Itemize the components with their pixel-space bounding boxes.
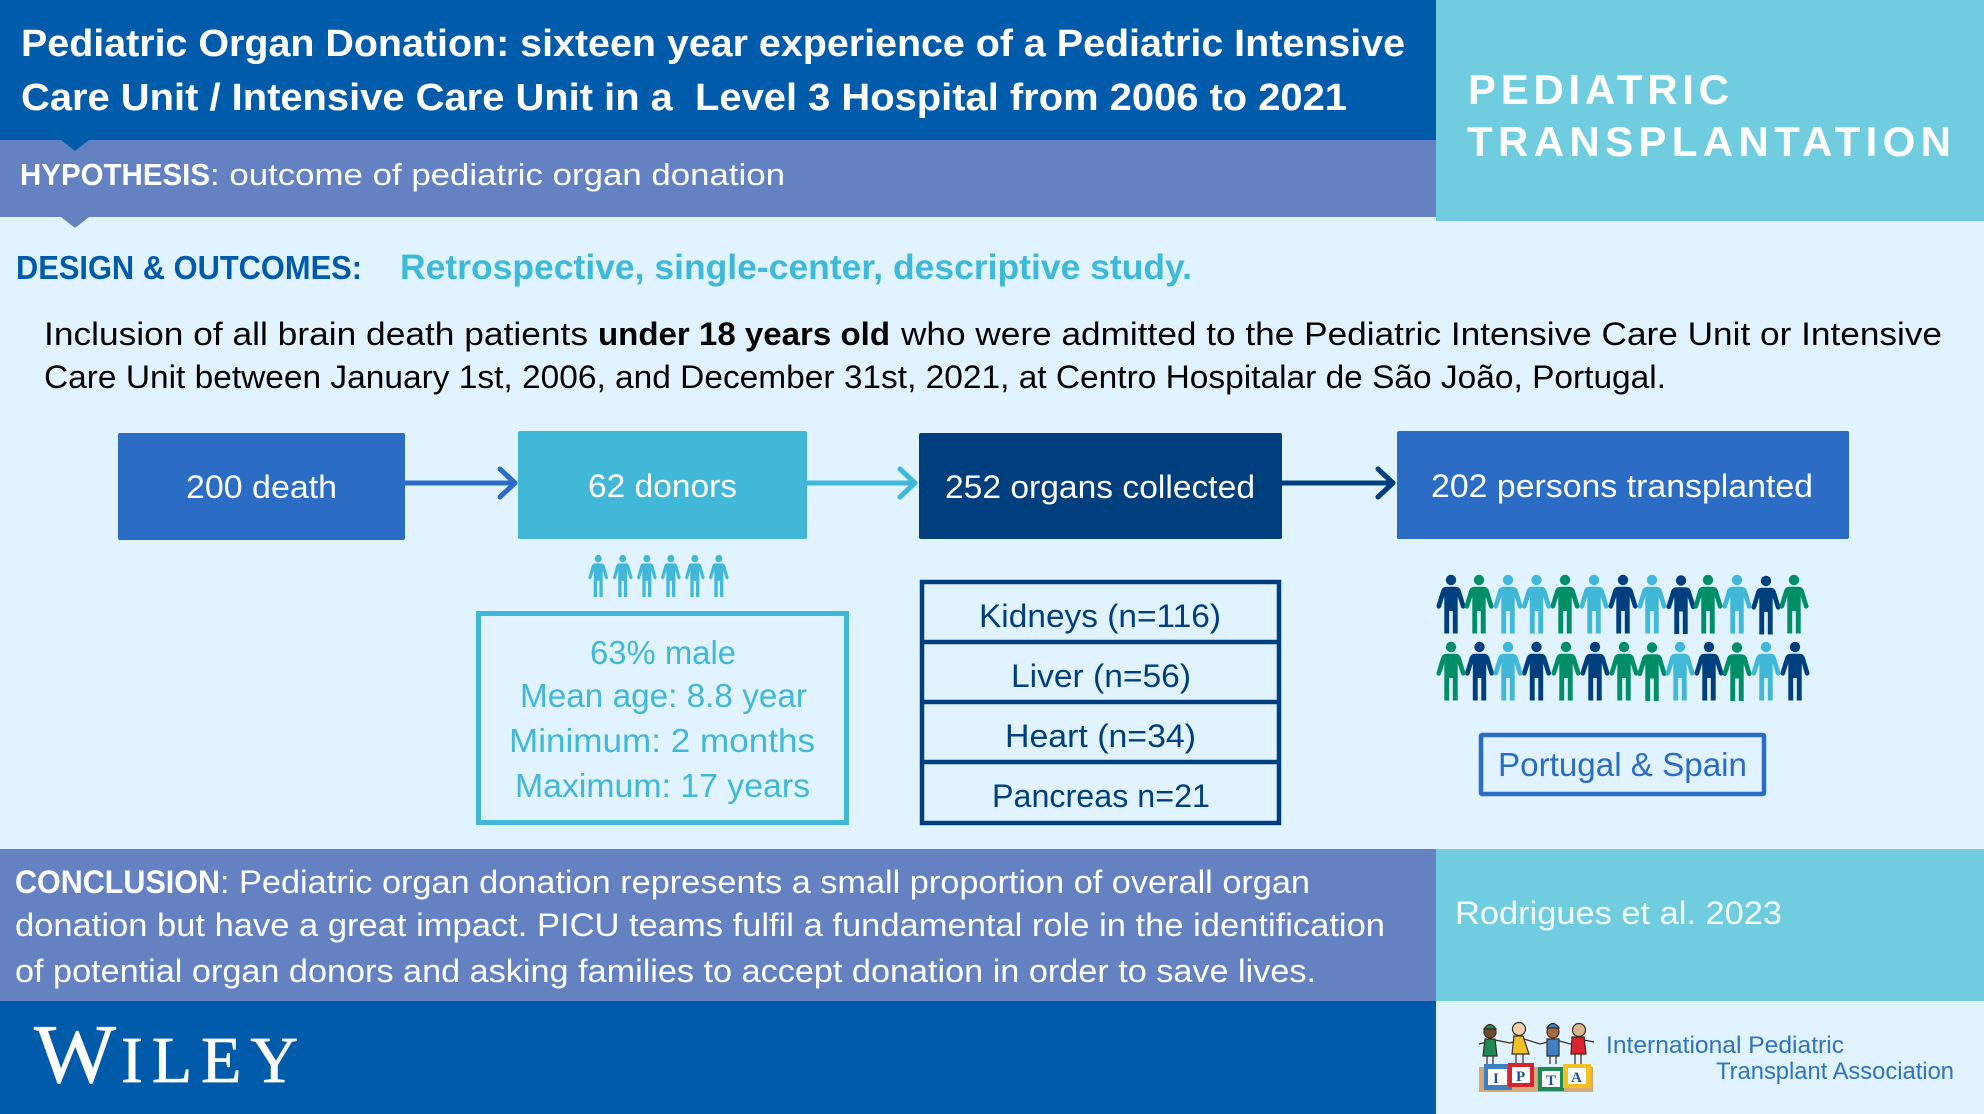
inclusion criteria text: who were admitted to the Pediatric Intensive Care Unit or Intensive <box>900 316 1942 352</box>
panel: organs collected table: Liver (n=56) <box>1011 658 1191 694</box>
flow box: 62 donors <box>518 431 807 539</box>
panel: organs collected table <box>922 582 1279 823</box>
flow box: 252 organs collected <box>919 433 1282 539</box>
logo text: International Pediatric <box>1606 1032 1844 1059</box>
hypothesis text <box>20 157 785 192</box>
journal name text: PEDIATRIC <box>1468 66 1729 113</box>
conclusion text: CONCLUSION <box>15 864 220 900</box>
inclusion criteria text <box>44 316 1942 395</box>
panel: journal name <box>1436 0 1984 221</box>
flow box: 200 death: 200 death <box>186 469 337 505</box>
panel: donor demographics <box>478 614 846 822</box>
flow box: 252 organs collected: 252 organs collected <box>945 469 1255 505</box>
panel: donor demographics: Mean age: 8.8 year <box>520 677 807 714</box>
icon: six donor figures <box>589 555 729 597</box>
logo: Wiley wordmark: W <box>34 1008 117 1101</box>
inclusion criteria text: Care Unit between January 1st, 2006, and December 31st, 2021, at Centro Hospitalar de São João, Portugal. <box>44 359 1666 395</box>
inclusion criteria text: under 18 years old <box>598 316 890 352</box>
pointer: hypothesis to design <box>61 217 89 228</box>
icon: transplant recipients figures <box>1436 575 1810 701</box>
hypothesis text: HYPOTHESIS <box>20 157 210 192</box>
flow box: 62 donors: 62 donors <box>588 468 737 504</box>
logo text <box>1606 1032 1954 1085</box>
arrow: organs to persons <box>1282 469 1393 497</box>
flow box: 200 death <box>118 433 405 540</box>
icon: IPTA children on blocks: A <box>1571 1070 1582 1086</box>
panel: conclusion <box>0 849 1436 1001</box>
panel: organs collected table: Kidneys (n=116) <box>979 598 1221 634</box>
heading: design and outcomes: Retrospective, single-center, descriptive study. <box>400 248 1192 287</box>
arrow: death to donors <box>405 469 515 497</box>
hypothesis text: : outcome of pediatric organ donation <box>210 157 785 192</box>
inclusion criteria text: Inclusion of all brain death patients <box>44 316 588 352</box>
panel: citation: Rodrigues et al. 2023 <box>1455 895 1782 931</box>
title text <box>21 23 1405 119</box>
logo: Wiley wordmark: ILEY <box>121 1024 298 1097</box>
arrow: donors to organs <box>807 469 915 497</box>
heading: design and outcomes: DESIGN & OUTCOMES: <box>16 249 362 286</box>
icon: IPTA children on blocks <box>1479 1022 1594 1092</box>
logo text: Transplant Association <box>1716 1058 1954 1085</box>
panel: title <box>0 0 1436 140</box>
icon: IPTA children on blocks: P <box>1516 1069 1525 1085</box>
journal name text <box>1467 66 1951 165</box>
icon: IPTA children on blocks: T <box>1546 1073 1556 1089</box>
pointer: title to hypothesis <box>61 140 89 151</box>
flow box: 202 persons transplanted <box>1397 431 1849 539</box>
panel: donor demographics: 63% male <box>590 634 736 671</box>
logo: International Pediatric Transplant Association <box>1479 1022 1954 1092</box>
heading: design and outcomes <box>16 248 1192 287</box>
panel: publisher footer <box>0 1001 1436 1114</box>
callout: Portugal and Spain: Portugal & Spain <box>1498 746 1747 783</box>
journal name text: TRANSPLANTATION <box>1467 118 1951 165</box>
conclusion text: of potential organ donors and asking families to accept donation in order to save lives. <box>15 953 1316 989</box>
flow box: 202 persons transplanted: 202 persons transplanted <box>1431 468 1813 504</box>
panel: donor demographics: Minimum: 2 months <box>509 722 815 759</box>
panel: organs collected table: Pancreas n=21 <box>992 778 1210 814</box>
panel: donor demographics: Maximum: 17 years <box>515 767 810 804</box>
logo: Wiley wordmark <box>34 1008 298 1101</box>
panel: citation <box>1436 849 1984 1001</box>
panel: organs collected table: Heart (n=34) <box>1005 718 1196 754</box>
panel: hypothesis <box>0 140 1436 217</box>
title text: Pediatric Organ Donation: sixteen year experience of a Pediatric Intensive <box>21 23 1405 65</box>
conclusion text: : Pediatric organ donation represents a small proportion of overall organ <box>220 864 1310 900</box>
callout: Portugal and Spain <box>1481 735 1764 794</box>
title text: Care Unit / Intensive Care Unit in a Level 3 Hospital from 2006 to 2021 <box>21 77 1347 119</box>
conclusion text <box>15 864 1385 989</box>
conclusion text: donation but have a great impact. PICU teams fulfil a fundamental role in the identification <box>15 907 1385 943</box>
icon: IPTA children on blocks: I <box>1493 1071 1499 1087</box>
